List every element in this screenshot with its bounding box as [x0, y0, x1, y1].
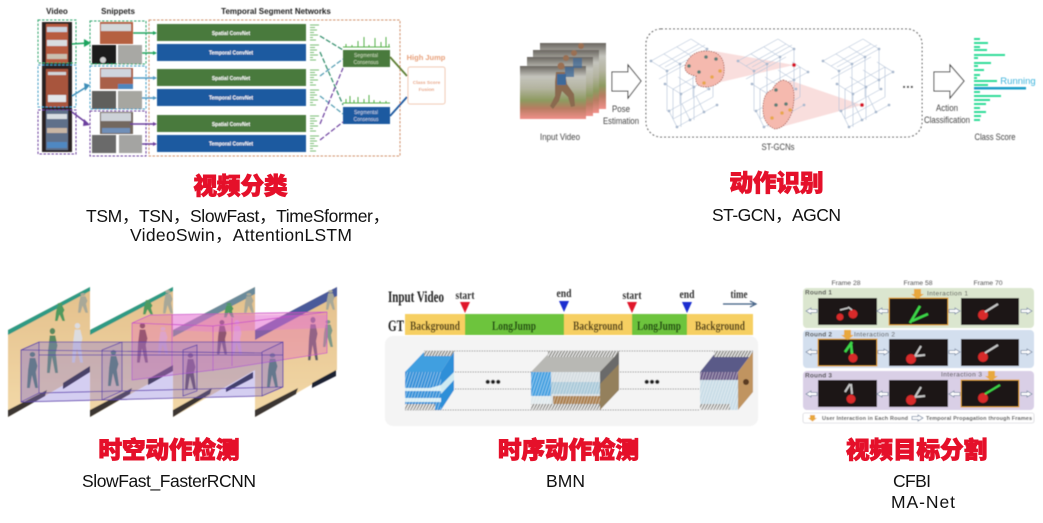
- label: pose estimation: Estimation: [603, 116, 639, 126]
- methods: temporal action detection: BMN: [546, 471, 585, 491]
- class score fusion box: Fusion: [419, 87, 434, 93]
- label: running: Running: [1000, 76, 1036, 87]
- panel: temporal action detection: [385, 288, 758, 426]
- segmental consensus boxes: Segmental: [354, 110, 378, 116]
- methods: video object segmentation: CFBI: [893, 471, 931, 491]
- snippet thumbnails: [92, 22, 142, 153]
- dashed connections to consensus: [320, 36, 343, 140]
- ellipsis: •••: [644, 374, 660, 391]
- arrows: video to snippets to nets: [72, 33, 155, 144]
- start and end markers: [456, 288, 695, 313]
- pink 3d box: [132, 312, 327, 380]
- title: spatio-temporal action detection: 时空动作检测: [98, 436, 240, 463]
- title: video object segmentation: 视频目标分割: [846, 437, 987, 463]
- heading: video: Video: [46, 7, 68, 16]
- label: action classification: Action: [936, 103, 958, 113]
- running score bar: [974, 87, 1026, 90]
- propagation arrows: [806, 308, 1032, 397]
- timeline segments: Background: [695, 319, 745, 333]
- legend: User Interaction in Each Round: [822, 416, 908, 422]
- skeleton graphs: [650, 39, 894, 128]
- frame 2: [90, 287, 173, 417]
- label: gt: GT: [388, 318, 404, 335]
- input video frames: [520, 43, 606, 119]
- st-gcn dashed container: [646, 29, 922, 137]
- start and end markers: end: [680, 289, 695, 301]
- interaction labels: [841, 289, 998, 381]
- segmental consensus boxes: Consensus: [353, 60, 379, 66]
- arrow: pose estimation: [612, 65, 641, 98]
- label: st-gcns: ST-GCNs: [762, 142, 795, 152]
- spatial and temporal convnet bars: [157, 24, 306, 152]
- interaction labels: Interaction 1: [927, 290, 968, 298]
- network outline: [149, 20, 400, 156]
- timeline segments: Background: [573, 319, 623, 333]
- round 1 row: Round 1: [805, 290, 832, 296]
- ellipsis: ...: [902, 75, 914, 91]
- start and end markers: start: [622, 290, 642, 302]
- frame labels: Frame 28: [831, 280, 861, 287]
- spatial and temporal convnet bars: Spatial ConvNet: [212, 122, 251, 128]
- purple 3d box: [21, 342, 283, 402]
- methods: video classification: [86, 206, 390, 245]
- round 3 row: Round 3: [805, 372, 832, 380]
- label: class score: Class Score: [974, 132, 1016, 142]
- label: input video: Input Video: [540, 132, 580, 142]
- start and end markers: end: [556, 288, 572, 300]
- methods: video classification: VideoSwin，AttentionLSTM: [130, 225, 352, 245]
- interaction labels: Interaction 2: [854, 332, 895, 338]
- time arrow: time: [730, 289, 748, 301]
- round 1 row: [803, 288, 1034, 328]
- frame 3: [173, 287, 255, 417]
- segmental consensus boxes: Consensus: [353, 117, 379, 123]
- attention cones: [704, 51, 862, 129]
- panel: video object segmentation: [803, 280, 1034, 423]
- spatial and temporal convnet bars: Temporal ConvNet: [209, 142, 253, 148]
- frame 4: [255, 287, 337, 417]
- ellipsis: •••: [485, 374, 501, 391]
- title: action recognition: 动作识别: [730, 170, 824, 196]
- round 3 row: [803, 371, 1034, 410]
- class score fusion box: [408, 67, 445, 104]
- panel: spatio-temporal action detection: [8, 287, 337, 417]
- legend: Temporal Propagation through Frames: [926, 416, 1032, 422]
- frame 1: [8, 287, 90, 417]
- background panel: [385, 336, 758, 426]
- timeline segments: [405, 314, 753, 335]
- spatial and temporal convnet bars: Spatial ConvNet: [212, 76, 251, 82]
- dotted guide lines: [405, 351, 753, 410]
- label: action classification: Classification: [924, 115, 970, 125]
- arrowheads: [83, 31, 157, 146]
- frame labels: Frame 70: [973, 280, 1003, 287]
- arrow: action classification: [934, 65, 964, 98]
- time arrow: [723, 289, 756, 307]
- highlighted neighbourhoods: [685, 51, 794, 129]
- video segment boxes: [38, 20, 76, 154]
- spatial and temporal convnet bars: Temporal ConvNet: [209, 96, 253, 102]
- heading: temporal segment networks: Temporal Segment Networks: [221, 7, 331, 16]
- segmental consensus boxes: [343, 50, 390, 124]
- panel: st-gcn diagram: [520, 29, 1036, 152]
- methods: video object segmentation: [891, 471, 955, 512]
- arrows to score fusion: [390, 57, 407, 116]
- methods: spatio-temporal action detection: SlowFast_FasterRCNN: [82, 471, 256, 492]
- spatial and temporal convnet bars: Spatial ConvNet: [212, 31, 251, 37]
- panel: temporal segment networks diagram: [38, 7, 446, 156]
- methods: video classification: TSM，TSN，SlowFast，TimeSformer，: [86, 206, 390, 226]
- round 2 row: [803, 330, 1034, 368]
- legend: [803, 413, 1034, 423]
- label: pose estimation: [603, 104, 639, 126]
- class score spikes: [310, 25, 319, 151]
- methods: video object segmentation: MA-Net: [891, 492, 955, 512]
- timeline segments: LongJump: [492, 319, 536, 333]
- timeline segments: LongJump: [637, 319, 681, 333]
- film strip: [42, 22, 72, 152]
- class score fusion box: Class Score: [413, 80, 441, 86]
- spatial and temporal convnet bars: Temporal ConvNet: [209, 50, 253, 56]
- interaction labels: Interaction 3: [941, 372, 982, 378]
- label: pose estimation: Pose: [612, 104, 630, 114]
- title: video classification: 视频分类: [194, 173, 288, 199]
- heading: snippets: Snippets: [101, 7, 135, 16]
- label: action classification: [924, 103, 970, 125]
- label: high jump: High Jump: [407, 53, 446, 62]
- label: input video: Input Video: [388, 289, 444, 306]
- methods: action recognition: ST-GCN，AGCN: [712, 205, 841, 225]
- highlighted joints: [687, 55, 864, 120]
- frame labels: Frame 58: [903, 280, 933, 287]
- consensus histograms: [343, 37, 390, 103]
- frame labels: [831, 280, 1003, 287]
- timeline segments: Background: [410, 319, 460, 333]
- snippet group boxes: [90, 21, 146, 156]
- title: temporal action detection: 时序动作检测: [498, 436, 639, 463]
- segmental consensus boxes: Segmental: [354, 53, 378, 59]
- video cube 1: [405, 351, 454, 410]
- video cube 2: [531, 351, 619, 410]
- video cube 3: [700, 351, 753, 410]
- class score bars: [974, 39, 1005, 120]
- start and end markers: start: [456, 290, 475, 302]
- round 2 row: Round 2: [805, 332, 832, 338]
